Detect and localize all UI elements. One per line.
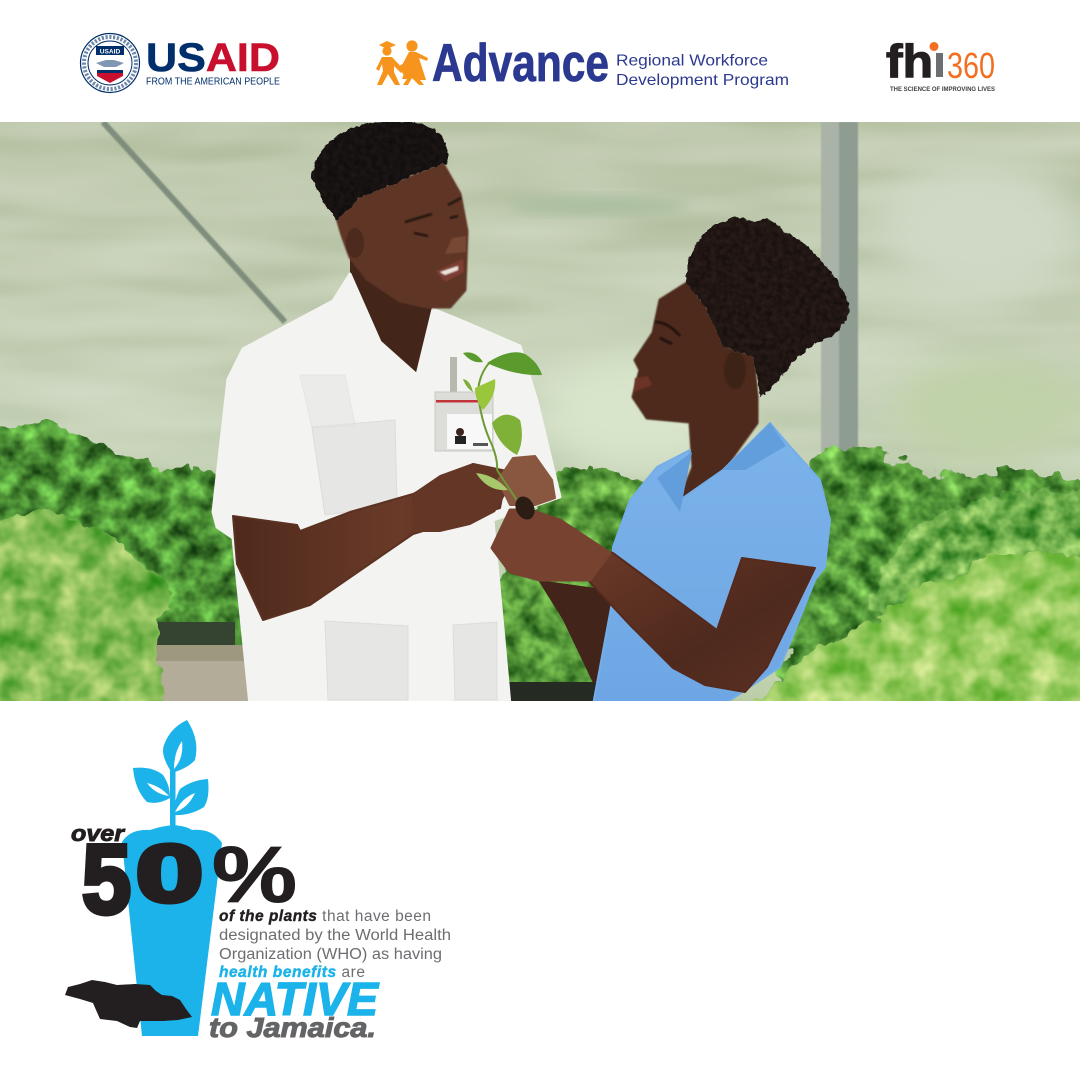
man's white shirt (213, 274, 560, 705)
shirt shading and pockets (300, 375, 497, 700)
background foliage (0, 424, 1080, 720)
man's holding hand (412, 463, 507, 532)
over: over (71, 821, 126, 846)
logo: fhi360 (886, 35, 996, 93)
polo collar (657, 423, 786, 512)
right leaf (173, 779, 208, 815)
man's face (337, 164, 467, 307)
woman's facial features (634, 322, 746, 392)
fh letters: fh (886, 35, 933, 87)
ID badge (435, 357, 493, 451)
digit 0: 0 (136, 829, 203, 919)
icon: map of Jamaica (65, 980, 192, 1028)
USAID wordmark: USAID (146, 36, 280, 80)
man's arm (233, 464, 507, 620)
man (213, 122, 560, 705)
description text: health benefits are (219, 964, 365, 981)
Advance tagline: Regional Workforce (616, 52, 768, 70)
Advance wordmark: Advance (432, 34, 609, 93)
description text (219, 908, 451, 981)
woman's back arm (538, 580, 616, 683)
seedling (463, 352, 542, 523)
seedling leaves (487, 352, 542, 375)
bright foreground foliage right (753, 550, 1080, 701)
diagonal support pole (103, 122, 285, 322)
vertical support post (821, 122, 858, 452)
headline: to Jamaica: to Jamaica. (209, 1012, 376, 1043)
man's facial features (405, 198, 466, 282)
orange dot (930, 42, 938, 51)
woman's neck and face (633, 283, 757, 500)
woman's blue polo shirt (593, 423, 830, 705)
top leaf (163, 720, 196, 773)
Advance tagline: Development Program (616, 72, 789, 89)
description text: of the plants that have been (219, 908, 431, 925)
seedling root ball (515, 496, 535, 520)
photo: two people examining a seedling in a greenhouse (0, 122, 1080, 720)
headline: NATIVE: NATIVE (211, 973, 379, 1025)
woman's forearm and upper arm (585, 547, 815, 692)
woman's hands (492, 510, 610, 580)
logo: Advance (376, 34, 789, 93)
seedling stem (478, 361, 518, 501)
man's hair (311, 122, 448, 220)
360: 360 (947, 45, 995, 86)
i stem (936, 53, 943, 77)
USAID tagline: FROM THE AMERICAN PEOPLE (146, 76, 280, 88)
plant graphic (122, 720, 222, 1036)
Advance tagline (616, 52, 789, 89)
percent sign: % (212, 830, 297, 919)
statistic: over 50% (71, 821, 297, 934)
description text: Organization (WHO) as having (219, 946, 442, 963)
fhi360 tagline: THE SCIENCE OF IMPROVING LIVES (890, 86, 996, 93)
greenhouse wall (0, 122, 1080, 701)
man's neck (350, 258, 432, 372)
planter tray and bench (156, 622, 596, 701)
digit 5: 5 (82, 824, 131, 934)
woman (492, 217, 850, 705)
left leaf (133, 768, 170, 803)
man's ear (346, 228, 364, 258)
icon: two students walking (376, 40, 428, 85)
bright foreground foliage left (0, 514, 172, 720)
USAID seal (80, 34, 140, 92)
man's open hand (498, 456, 555, 505)
woman's hair (687, 217, 850, 397)
plant stem (170, 765, 176, 830)
description text: designated by the World Health (219, 927, 451, 944)
USAID seal: USAID (100, 48, 120, 55)
pot (122, 825, 222, 1036)
logo: USAID (80, 34, 280, 92)
